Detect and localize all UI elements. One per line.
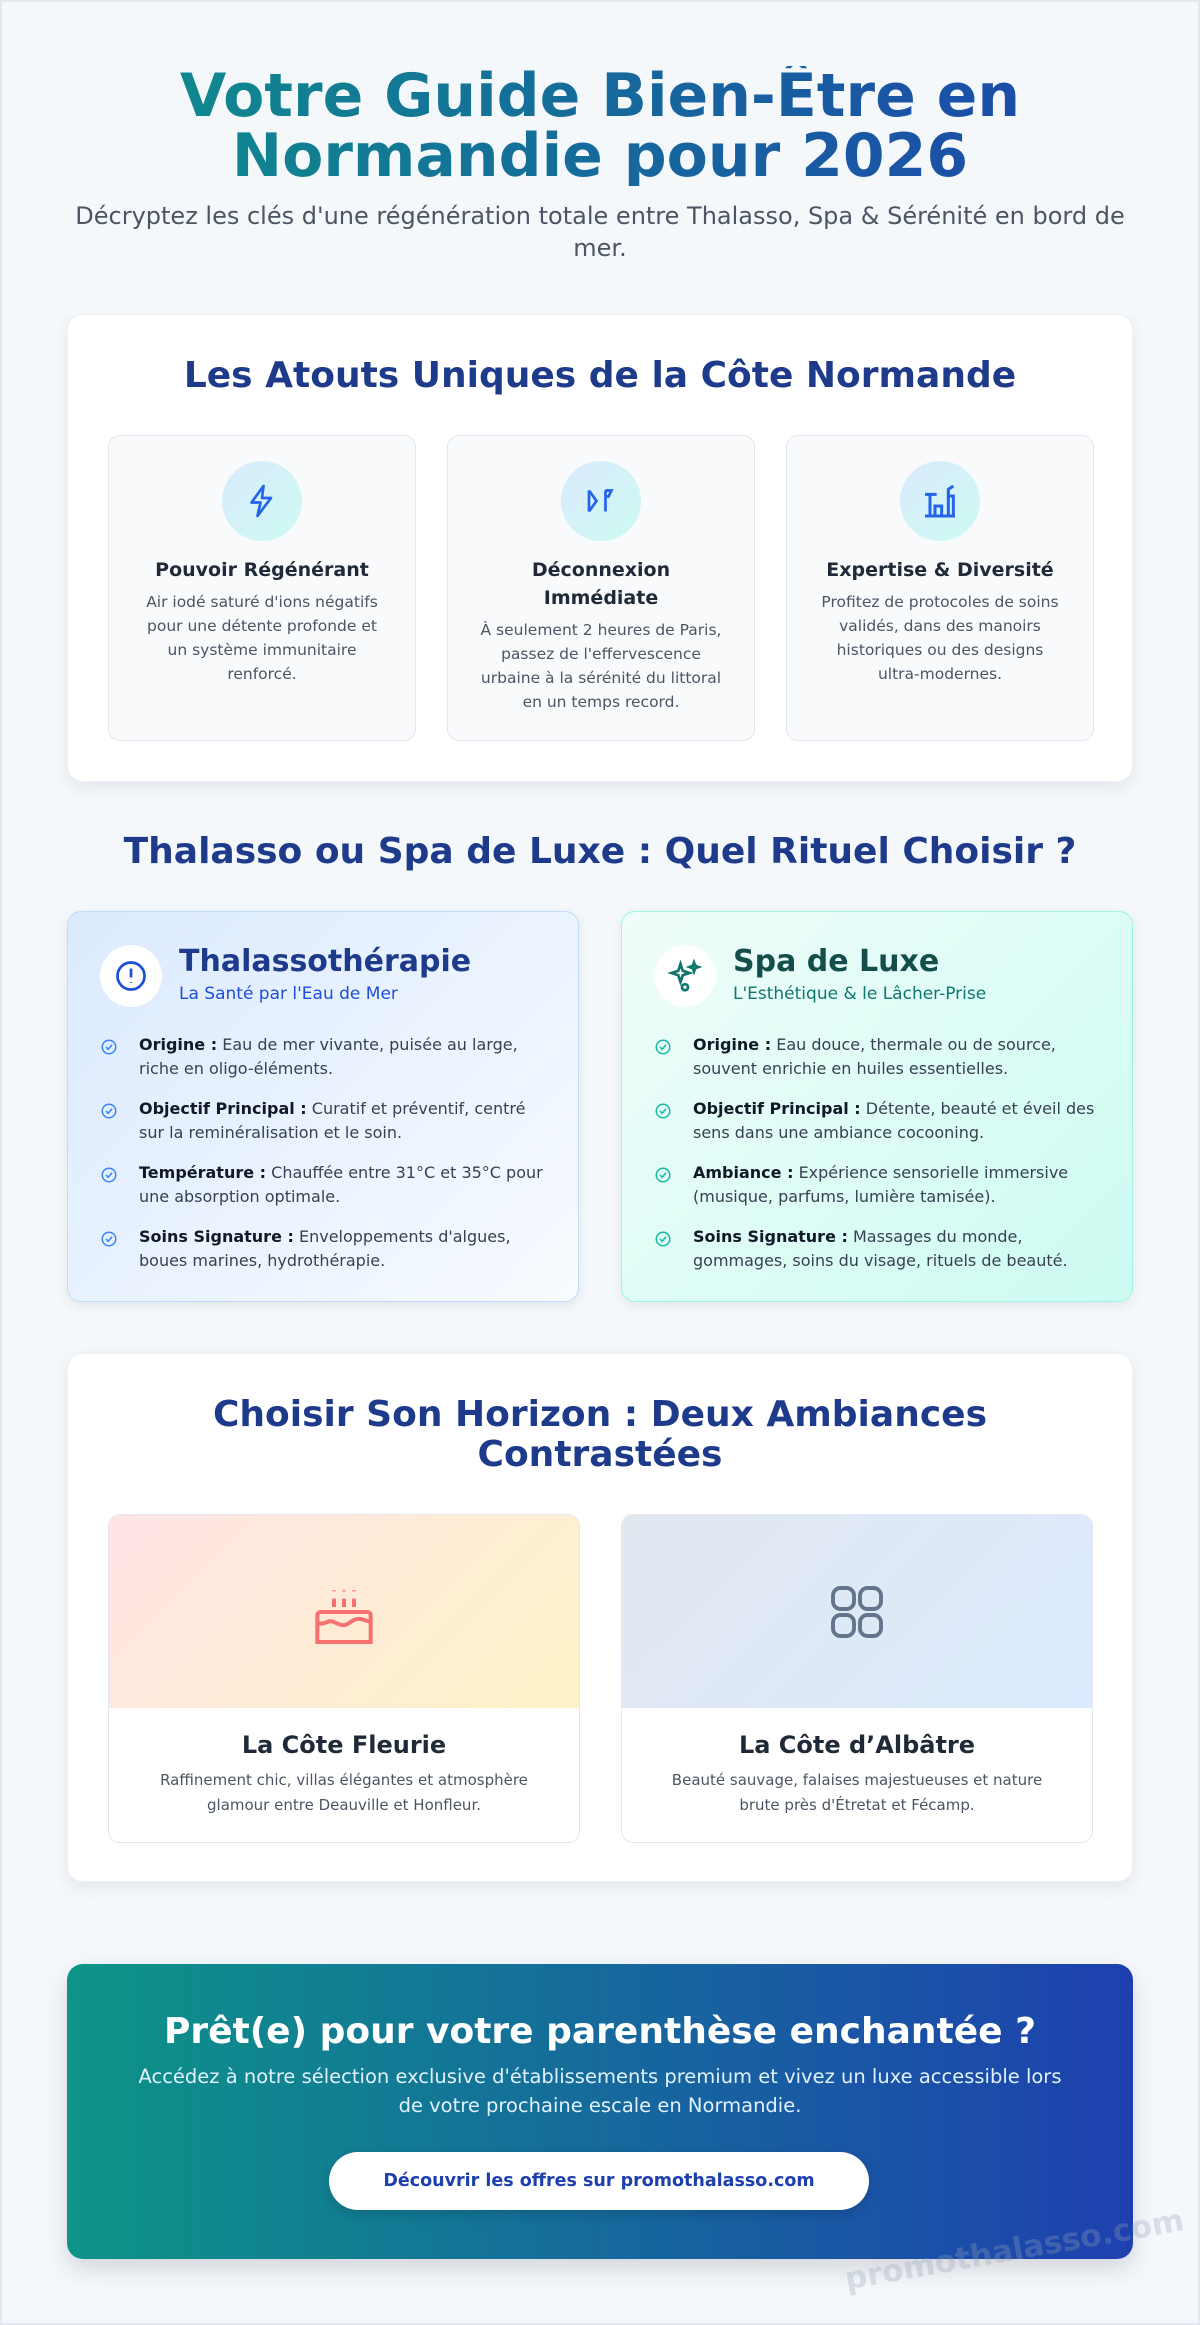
- list: spa: Soins Signature : Massages du monde, gommages, soins du visage, rituels de beauté.: [693, 1227, 1068, 1270]
- card: expertise: Profitez de protocoles de soins validés, dans des manoirs historiques ou des designs ultra-modernes.: [821, 593, 1059, 683]
- panel: spa de luxe: L'Esthétique & le Lâcher-Prise: [733, 984, 986, 1004]
- icon: buildings: [900, 461, 980, 541]
- card: côte fleurie: [108, 1514, 580, 1843]
- card: côte fleurie: Raffinement chic, villas élégantes et atmosphère glamour entre Deauville et Honfleur.: [160, 1771, 528, 1814]
- panel: thalassothérapie: La Santé par l'Eau de Mer: [179, 984, 398, 1004]
- watermark: promothalasso.com: [842, 2202, 1187, 2297]
- card: pouvoir régénérant: [108, 435, 416, 741]
- subtitle: Décryptez les clés d'une régénération totale entre Thalasso, Spa & Sérénité en bord de mer.: [75, 202, 1125, 262]
- icon: sparkles: [654, 945, 716, 1007]
- card: côte fleurie: La Côte Fleurie: [242, 1731, 446, 1759]
- icon: flags: [561, 461, 641, 541]
- panel: spa de luxe: Spa de Luxe: [733, 944, 939, 979]
- button: cta: [329, 2152, 869, 2210]
- list: spa: Origine : Eau douce, thermale ou de source, souvent enrichie en huiles essentielles.: [693, 1035, 1056, 1078]
- card: pouvoir régénérant: Air iodé saturé d'ions négatifs pour une détente profonde et un système immunitaire renforcé.: [146, 593, 378, 683]
- title: [0, 66, 1200, 186]
- card: déconnexion: [447, 435, 755, 741]
- card: déconnexion: À seulement 2 heures de Paris, passez de l'effervescence urbaine à la sérénité du littoral en un temps record.: [481, 621, 721, 711]
- card: côte d'albâtre: [621, 1514, 1093, 1843]
- title: Normandie pour 2026: [232, 121, 968, 191]
- card: expertise: [786, 435, 1094, 741]
- button: cta: Découvrir les offres sur promothalasso.com: [383, 2171, 815, 2191]
- heading: cta: Prêt(e) pour votre parenthèse enchantée ?: [164, 2011, 1036, 2052]
- card: côte d'albâtre: La Côte d’Albâtre: [739, 1731, 975, 1759]
- card: expertise: Expertise & Diversité: [826, 559, 1054, 581]
- list: thalasso: Température : Chauffée entre 31°C et 35°C pour une absorption optimale.: [139, 1163, 543, 1206]
- panel: thalassothérapie: [67, 911, 579, 1302]
- panel: horizon: [67, 1353, 1133, 1882]
- list: thalasso: Objectif Principal : Curatif et préventif, centré sur la reminéralisation et le soin.: [139, 1099, 525, 1142]
- list: spa: Ambiance : Expérience sensorielle immersive (musique, parfums, lumière tamisée).: [693, 1163, 1068, 1206]
- list: thalasso: [102, 1035, 543, 1270]
- heading: rituel: Thalasso ou Spa de Luxe : Quel Rituel Choisir ?: [124, 831, 1076, 872]
- icon: alert circle: [100, 945, 162, 1007]
- card: déconnexion: Immédiate: [544, 587, 658, 609]
- panel: spa de luxe: [621, 911, 1133, 1302]
- icon: lightning: [222, 461, 302, 541]
- list: spa: Objectif Principal : Détente, beauté et éveil des sens dans une ambiance cocooning.: [693, 1099, 1094, 1142]
- heading: horizon: [213, 1394, 987, 1475]
- heading: atouts: Les Atouts Uniques de la Côte Normande: [184, 355, 1016, 396]
- list: spa: [656, 1035, 1094, 1270]
- text: cta: Accédez à notre sélection exclusive d'établissements premium et vivez un luxe accessible lors de votre prochaine escale en Normandie.: [138, 2065, 1062, 2117]
- title: Votre Guide Bien-Être en: [180, 61, 1020, 131]
- panel: atouts: [67, 314, 1133, 782]
- list: thalasso: Soins Signature : Enveloppements d'algues, boues marines, hydrothérapie.: [139, 1227, 511, 1270]
- heading: horizon: Choisir Son Horizon : Deux Ambiances: [213, 1394, 987, 1435]
- card: pouvoir régénérant: Pouvoir Régénérant: [155, 559, 369, 581]
- panel: thalassothérapie: Thalassothérapie: [179, 944, 471, 979]
- card: déconnexion: Déconnexion: [532, 559, 670, 581]
- card: côte d'albâtre: Beauté sauvage, falaises majestueuses et nature brute près d'Étretat et Fécamp.: [672, 1771, 1042, 1814]
- panel: call to action: [67, 1964, 1133, 2259]
- list: thalasso: Origine : Eau de mer vivante, puisée au large, riche en oligo-éléments.: [139, 1035, 518, 1078]
- heading: horizon: Contrastées: [478, 1434, 722, 1475]
- icon: cake: [109, 1515, 579, 1708]
- icon: grid: [622, 1515, 1092, 1708]
